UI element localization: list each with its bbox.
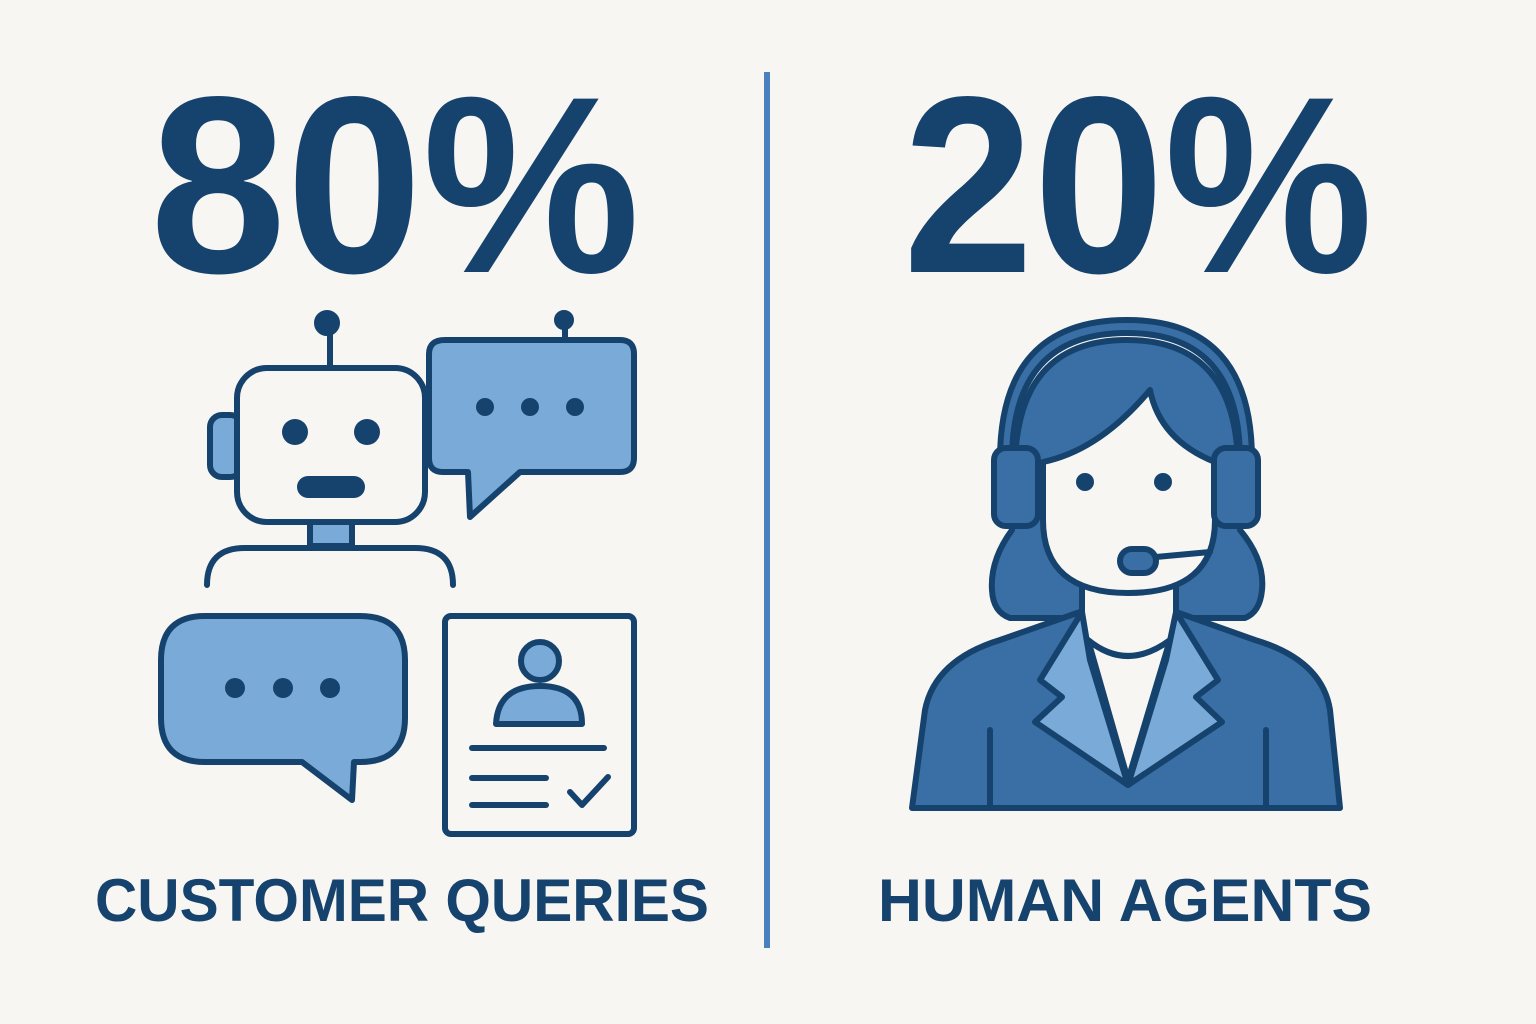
label: human agents: HUMAN AGENTS [878,867,1372,934]
label: customer queries: CUSTOMER QUERIES [95,867,709,934]
icon: human agent [912,320,1340,808]
icon: speech bubble top [429,313,634,517]
stat: 20%: 20% [903,45,1373,326]
icon: robot [207,313,453,585]
divider [764,72,770,948]
icon: profile document [445,616,634,834]
icon: speech bubble bottom [161,616,405,800]
stat: 80%: 80% [150,45,640,326]
